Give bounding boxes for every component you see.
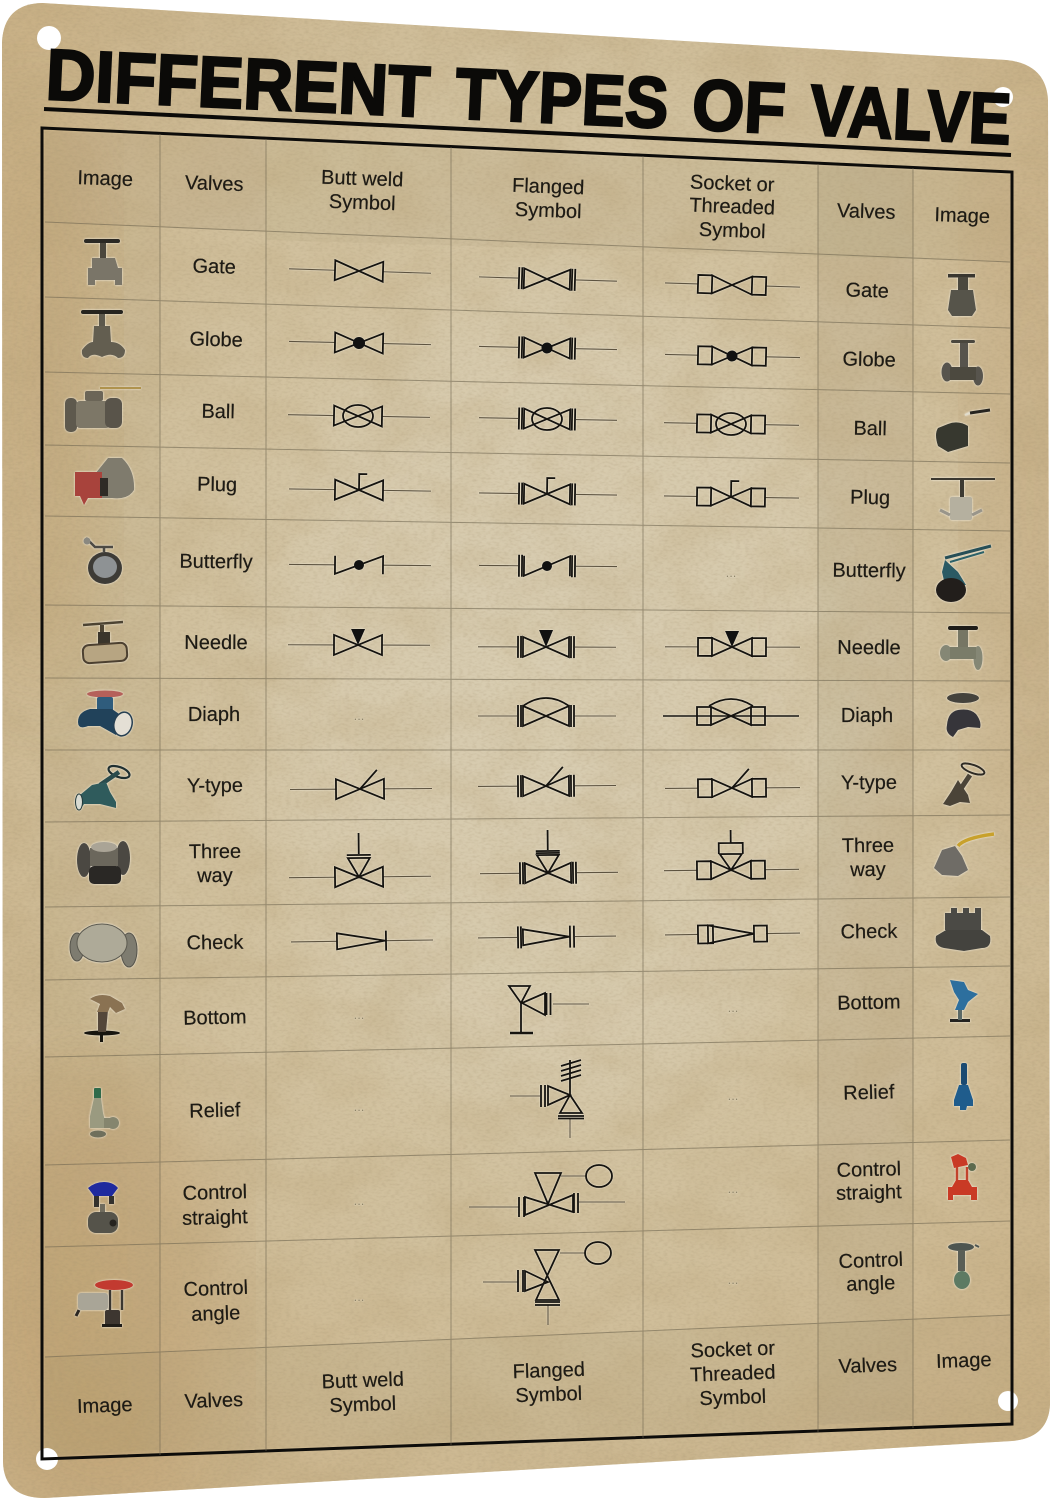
right column valve names <box>832 279 906 1296</box>
right column valve images <box>931 274 995 1289</box>
right column valve names: Control <box>838 1249 903 1273</box>
relief flanged <box>510 1060 584 1138</box>
right column valve names: way <box>849 859 886 881</box>
footer row left to right: Valves <box>838 1354 897 1378</box>
gate butt weld <box>289 259 431 283</box>
not applicable bottom socket: ... <box>728 1000 738 1015</box>
left column valve names: Control <box>182 1181 247 1205</box>
globe socket <box>665 345 800 367</box>
left column valve names: Diaph <box>188 704 240 726</box>
header row left to right: Socket or <box>690 172 775 196</box>
icon: gate valve right <box>948 274 976 316</box>
right column valve names: Bottom <box>837 991 901 1015</box>
globe flanged <box>479 335 617 361</box>
title: VALVE <box>808 71 1013 160</box>
butterfly flanged <box>479 554 617 578</box>
right column valve names: Y-type <box>841 772 897 794</box>
left column valve names: Ball <box>201 401 235 423</box>
icon: globe valve right <box>942 340 983 386</box>
header row left to right: Image <box>77 167 133 191</box>
icon: ball valve <box>65 388 141 432</box>
left column valve images <box>65 239 141 1327</box>
control angle flanged <box>483 1242 611 1325</box>
left column valve names: Bottom <box>183 1006 247 1030</box>
footer row left to right <box>77 1338 992 1418</box>
diaph socket <box>663 699 799 725</box>
three way flanged <box>480 829 618 885</box>
left column valve names: way <box>196 865 233 887</box>
title: TYPES <box>454 54 670 144</box>
left column valve names: Globe <box>189 328 243 352</box>
plug socket <box>664 480 799 507</box>
icon: check valve right <box>936 908 990 951</box>
header row left to right: Symbol <box>514 199 582 223</box>
title: DIFFERENT <box>44 35 432 133</box>
not applicable control straight butt weld: ... <box>354 1193 364 1208</box>
icon: three way valve right <box>934 834 994 876</box>
header row left to right: Symbol <box>698 219 766 243</box>
gate flanged <box>479 266 617 292</box>
ball socket <box>664 412 799 436</box>
icon: plug valve <box>75 458 134 505</box>
icon: globe valve <box>81 310 125 358</box>
not applicable bottom butt weld: ... <box>354 1007 364 1022</box>
header row left to right: Valves <box>837 200 896 224</box>
icon: relief valve <box>90 1088 119 1138</box>
gate socket <box>665 274 800 296</box>
not applicable diaph butt weld: ... <box>354 708 364 723</box>
not applicable butterfly socket: ... <box>726 565 736 580</box>
footer row left to right: Symbol <box>699 1386 767 1410</box>
right column valve names: Control <box>836 1158 901 1182</box>
left column valve names: Y-type <box>187 775 243 797</box>
not applicable control angle butt weld: ... <box>354 1289 364 1304</box>
icon: control straight valve <box>88 1182 118 1233</box>
icon: control angle valve <box>76 1280 133 1327</box>
socket or threaded symbols column <box>663 274 800 1287</box>
right column valve names: Butterfly <box>832 560 906 582</box>
icon: diaphragm valve right <box>947 693 980 737</box>
right column valve names: Three <box>842 835 894 857</box>
check butt weld <box>291 930 433 952</box>
icon: plug valve right <box>931 478 995 520</box>
icon: needle valve <box>82 622 128 664</box>
left column valve names: Check <box>186 932 244 954</box>
header row left to right: Valves <box>185 172 244 196</box>
right column valve names: Globe <box>842 348 896 372</box>
not applicable relief socket: ... <box>728 1088 738 1103</box>
icon: butterfly valve right <box>936 546 991 602</box>
icon: bottom valve right <box>950 980 978 1022</box>
footer row left to right: Flanged <box>512 1359 585 1383</box>
footer row left to right: Valves <box>184 1389 243 1413</box>
left column valve names: Three <box>189 841 241 863</box>
left column valve names: angle <box>191 1302 241 1326</box>
title <box>44 35 1013 160</box>
ball flanged <box>479 407 617 431</box>
plug butt weld <box>289 473 431 501</box>
needle socket <box>665 631 800 656</box>
check socket <box>665 924 800 944</box>
icon: diaphragm valve <box>78 690 135 738</box>
three way socket <box>664 829 799 880</box>
left column valve names: Plug <box>197 474 237 496</box>
footer row left to right: Socket or <box>690 1338 776 1362</box>
plug flanged <box>479 477 617 506</box>
header row left to right <box>77 167 990 243</box>
icon: butterfly valve <box>84 538 122 584</box>
left column valve names: Needle <box>184 632 248 654</box>
needle butt weld <box>288 629 430 655</box>
icon: y-type valve <box>76 764 131 810</box>
icon: relief valve right <box>954 1063 973 1110</box>
left column valve names: Gate <box>192 255 236 279</box>
left column valve names <box>179 255 253 1326</box>
right column valve names: Ball <box>853 418 887 440</box>
butt weld symbols column <box>288 259 433 1304</box>
three way butt weld <box>289 832 431 888</box>
footer row left to right: Threaded <box>690 1362 776 1386</box>
diaph flanged <box>478 698 616 727</box>
right column valve names: Plug <box>850 487 890 509</box>
left column valve names: Relief <box>189 1099 241 1123</box>
y-type flanged <box>478 767 616 797</box>
footer row left to right: Symbol <box>515 1383 583 1407</box>
left column valve names: straight <box>182 1206 248 1230</box>
footer row left to right: Symbol <box>329 1393 397 1417</box>
not applicable control straight socket: ... <box>728 1181 738 1196</box>
flanged symbols column <box>469 266 625 1325</box>
right column valve names: Check <box>840 921 898 943</box>
icon: y-type valve right <box>943 761 986 806</box>
title: OF <box>691 65 787 150</box>
right column valve names: Diaph <box>841 705 893 727</box>
icon: needle valve right <box>940 626 982 670</box>
right column valve names: Gate <box>845 279 889 303</box>
ball butt weld <box>288 404 430 428</box>
icon: control angle valve right <box>948 1243 979 1289</box>
icon: gate valve <box>84 239 122 285</box>
right column valve names: Relief <box>843 1081 895 1105</box>
footer row left to right: Butt weld <box>321 1369 404 1393</box>
icon: check valve <box>70 924 137 967</box>
bottom flanged <box>509 986 589 1033</box>
icon: control straight valve right <box>948 1154 977 1200</box>
globe butt weld <box>289 331 431 355</box>
footer row left to right: Image <box>77 1394 133 1418</box>
not applicable control angle socket: ... <box>728 1272 738 1287</box>
needle flanged <box>478 630 616 658</box>
check flanged <box>478 925 616 949</box>
header row left to right: Threaded <box>689 195 775 219</box>
header row left to right: Flanged <box>512 175 585 199</box>
not applicable relief butt weld: ... <box>354 1099 364 1114</box>
control straight flanged <box>469 1165 625 1217</box>
header row left to right: Symbol <box>328 191 396 215</box>
left column valve names: Butterfly <box>179 551 253 573</box>
footer row left to right: Image <box>936 1349 992 1373</box>
right column valve names: angle <box>846 1272 896 1296</box>
y-type butt weld <box>290 769 432 799</box>
icon: three way valve <box>77 841 130 884</box>
header row left to right: Image <box>934 204 990 228</box>
icon: ball valve right <box>936 410 990 452</box>
left column valve names: Control <box>183 1277 248 1301</box>
title underline <box>44 109 1011 155</box>
butterfly butt weld <box>289 555 431 575</box>
y-type socket <box>665 769 800 797</box>
right column valve names: Needle <box>837 637 901 659</box>
header row left to right: Butt weld <box>321 167 404 191</box>
icon: bottom valve <box>84 995 125 1042</box>
right column valve names: straight <box>836 1181 902 1205</box>
